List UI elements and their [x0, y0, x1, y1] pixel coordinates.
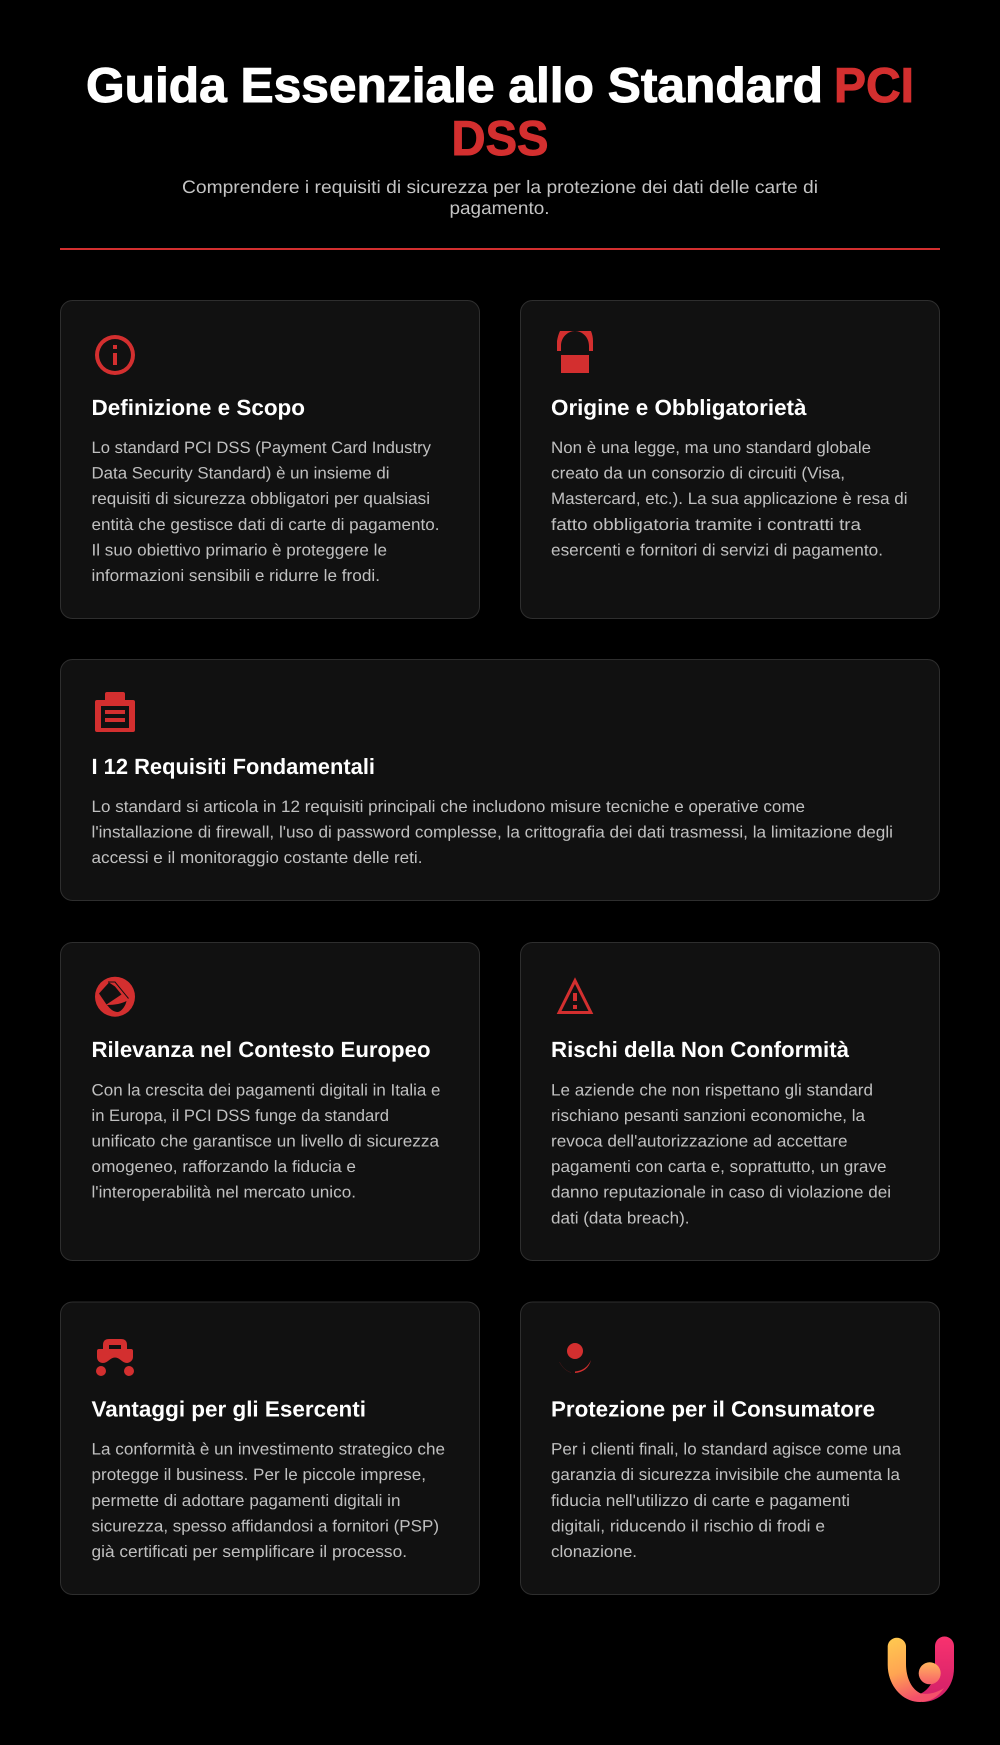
text block: accessi e il monitoraggio costante delle reti. — [92, 849, 422, 867]
subtitle — [182, 177, 818, 218]
title: PCI — [834, 59, 914, 113]
heading: Origine e Obbligatorietà — [551, 395, 807, 420]
heading: Rilevanza nel Contesto Europeo — [92, 1037, 430, 1062]
heading: Definizione e Scopo — [92, 395, 305, 420]
text block: Mastercard, etc.). La sua applicazione è resa di — [551, 490, 908, 508]
text block: revoca dell'autorizzazione ad accettare — [551, 1132, 848, 1150]
heading: Rischi della Non Conformità — [551, 1037, 850, 1062]
text block: permette di adottare pagamenti digitali in — [92, 1492, 400, 1510]
title: Guida Essenziale allo Standard — [86, 59, 823, 113]
icon: logo — [888, 1636, 954, 1702]
subtitle: pagamento. — [450, 198, 550, 218]
heading: I 12 Requisiti Fondamentali — [92, 754, 375, 779]
text block: sicurezza, spesso affidandosi a fornitori (PSP) — [92, 1517, 439, 1535]
text block: clonazione. — [551, 1543, 637, 1561]
icon: clipboard — [95, 692, 135, 732]
text block — [551, 1441, 902, 1561]
text block — [92, 439, 440, 585]
panel: origine e obbligatorieta — [520, 300, 940, 618]
header — [86, 59, 914, 218]
text block: l'installazione di firewall, l'uso di password complesse, la crittografia dei dati trasmessi, la limitazione degli — [92, 824, 893, 842]
text block: protegge il business. Per le piccole imprese, — [92, 1466, 426, 1484]
panel: i 12 requisiti — [60, 660, 940, 900]
icon: info — [95, 335, 135, 375]
text block: omogeneo, rafforzando la fiducia e — [92, 1158, 356, 1176]
text block: danno reputazionale in caso di violazione dei — [551, 1184, 891, 1202]
text block: già certificati per semplificare il processo. — [92, 1543, 407, 1561]
text block: l'interoperabilità nel mercato unico. — [92, 1184, 356, 1202]
icon: warning — [557, 977, 593, 1014]
text block: creato da un consorzio di circuiti (Visa, — [551, 465, 845, 483]
text block: La conformità è un investimento strategico che — [92, 1441, 445, 1459]
icon: globe — [95, 977, 135, 1017]
icon: lock — [557, 331, 593, 373]
panel: protezione consumatore — [520, 1302, 940, 1594]
panel: rischi — [520, 942, 940, 1260]
text block: Non è una legge, ma uno standard globale — [551, 439, 871, 457]
text block: esercenti e fornitori di servizi di pagamento. — [551, 541, 883, 559]
text block: entità che gestisce dati di carte di pagamento. — [92, 516, 440, 534]
text block: garanzia di sicurezza invisibile che aumenta la — [551, 1466, 901, 1484]
panel: vantaggi esercenti — [60, 1302, 480, 1594]
icon: shop — [96, 1339, 134, 1376]
title: DSS — [452, 112, 548, 166]
text block — [92, 1081, 440, 1202]
text block — [551, 439, 908, 559]
text block: rischiano pesanti sanzioni economiche, la — [551, 1107, 866, 1125]
text block: requisiti di sicurezza obbligatori per qualsiasi — [92, 490, 430, 508]
subtitle: Comprendere i requisiti di sicurezza per la protezione dei dati delle carte di — [182, 177, 818, 197]
text block: Con la crescita dei pagamenti digitali in Italia e — [92, 1081, 440, 1099]
text block — [92, 798, 893, 867]
text block — [92, 1441, 445, 1561]
text block: pagamenti con carta e, soprattutto, un grave — [551, 1158, 886, 1176]
text block: fatto obbligatoria tramite i contratti tra — [551, 516, 862, 534]
panel: rilevanza europea — [60, 942, 480, 1260]
text block: in Europa, il PCI DSS funge da standard — [92, 1107, 389, 1125]
text block: Lo standard si articola in 12 requisiti principali che includono misure tecniche e operative come — [92, 798, 805, 816]
panel: definizione e scopo — [60, 300, 480, 618]
text block: Le aziende che non rispettano gli standard — [551, 1081, 873, 1099]
text block: informazioni sensibili e ridurre le frodi. — [92, 567, 380, 585]
text block: dati (data breach). — [551, 1209, 690, 1227]
text block: Il suo obiettivo primario è proteggere le — [92, 541, 387, 559]
text block: fiducia nell'utilizzo di carte e pagamenti — [551, 1492, 850, 1510]
title — [86, 59, 914, 166]
heading: Vantaggi per gli Esercenti — [92, 1396, 366, 1422]
text block: Data Security Standard) è un insieme di — [92, 465, 390, 483]
heading: Protezione per il Consumatore — [551, 1396, 875, 1422]
icon: person — [560, 1343, 591, 1373]
text block: Per i clienti finali, lo standard agisce come una — [551, 1441, 902, 1459]
text block: digitali, riducendo il rischio di frodi e — [551, 1517, 825, 1535]
text block: unificato che garantisce un livello di sicurezza — [92, 1132, 440, 1150]
text block: Lo standard PCI DSS (Payment Card Industry — [92, 439, 432, 457]
text block — [551, 1081, 891, 1227]
